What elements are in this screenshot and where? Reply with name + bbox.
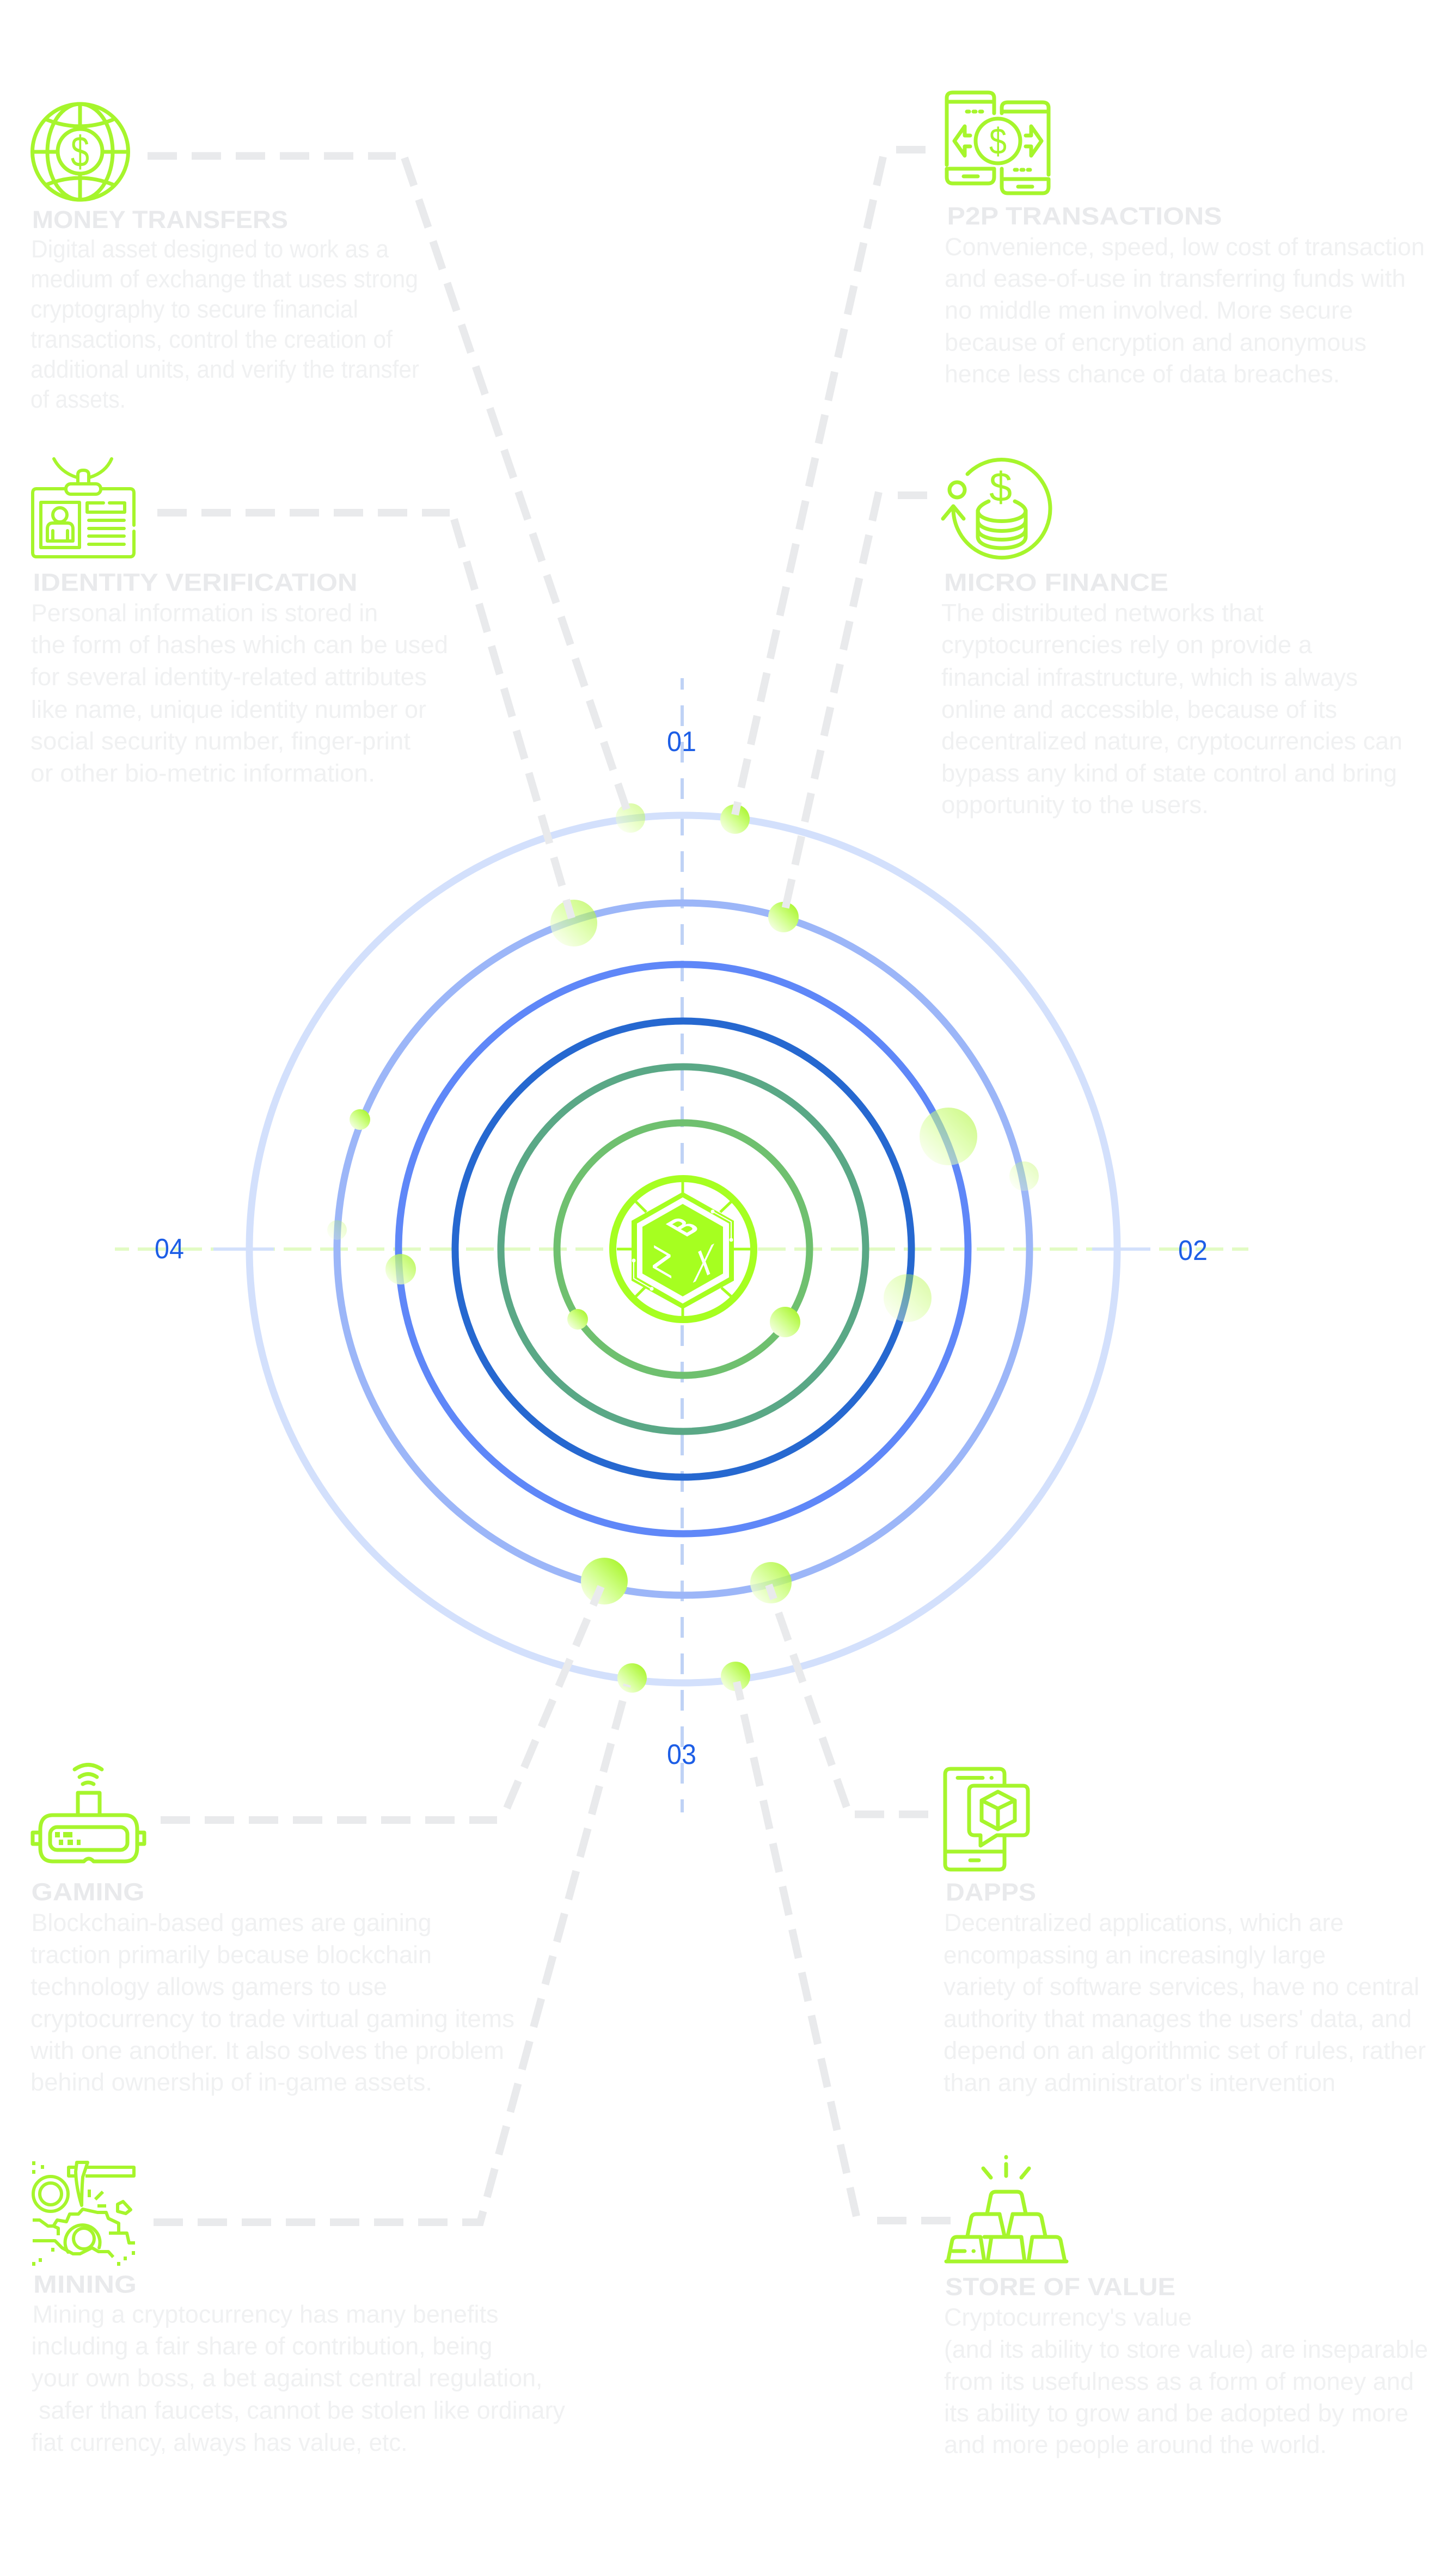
body text: Convenience, speed, low cost of transaction [945,233,1425,261]
body text: (and its ability to store value) are inseparable [944,2335,1428,2363]
body text: cryptography to secure financial [30,295,358,323]
body text: than any administrator's intervention [944,2069,1335,2097]
axis labels: 01 [667,726,696,758]
axis labels [155,726,1208,1770]
body text: Personal information is stored in [31,599,378,627]
body text: Blockchain-based games are gaining [32,1909,431,1936]
body text: technology allows gamers to use [30,1972,387,2001]
panel: store of value [944,2157,1428,2458]
body text: social security number, finger-print [30,727,411,755]
central logo: Z [652,1237,672,1287]
heading: MINING [33,2271,137,2298]
axis labels: 02 [1178,1235,1208,1267]
icon: smartphone with cube bubble [945,1769,1028,1870]
body text [30,235,419,413]
icon: coin stack with cycle arrow [943,460,1050,558]
body text [945,233,1425,388]
body text: because of encryption and anonymous [945,329,1367,356]
heading: STORE OF VALUE [945,2273,1175,2301]
panel: mining [32,2161,565,2456]
body text: online and accessible, because of its [941,696,1337,723]
body text: your own boss, a bet against central regulation, [32,2364,542,2391]
body text: safer than faucets, cannot be stolen like ordinary [39,2396,565,2424]
heading: P2P TRANSACTIONS [947,202,1222,230]
panel: P2P transactions [945,93,1425,388]
body text [944,2303,1428,2458]
panel: micro finance [941,460,1402,819]
body text: the form of hashes which can be used [31,631,448,659]
central logo: X [691,1234,716,1293]
body text: additional units, and verify the transfer [30,355,419,383]
dashed connectors [148,150,951,2222]
body text: Digital asset designed to work as a [31,235,389,263]
icon: pickaxe and coins [32,2161,135,2266]
body text: decentralized nature, cryptocurrencies can [941,727,1402,755]
body text: its ability to grow and be adopted by more [944,2399,1408,2427]
body text: no middle men involved. More secure [945,296,1353,324]
body text: with one another. It also solves the problem [30,2037,504,2064]
central logo: B [658,1213,708,1241]
icon: coin stack with cycle arrow: $ [989,464,1012,511]
heading: MONEY TRANSFERS [32,206,288,233]
axis labels: 04 [155,1233,184,1265]
icon: two phones exchanging money: $ [989,121,1007,162]
body text: encompassing an increasingly large [944,1941,1326,1969]
body text: Mining a cryptocurrency has many benefits [33,2300,499,2328]
heading: MICRO FINANCE [944,568,1168,597]
panel: dapps [944,1769,1426,2097]
icon: VR headset with wifi [33,1765,144,1861]
heading: IDENTITY VERIFICATION [33,568,357,597]
body text: medium of exchange that uses strong [30,265,418,293]
body text: Cryptocurrency's value [944,2303,1192,2331]
orbit dots [327,803,1039,1693]
body text [32,2300,565,2456]
icon: gold bars [946,2157,1067,2261]
icon: globe with dollar [33,104,128,200]
concentric rings [249,815,1117,1683]
panel: gaming [30,1765,514,2096]
body text: and more people around the world. [944,2431,1327,2458]
axes: dashed cross [115,678,1248,1812]
body text: hence less chance of data breaches. [945,360,1340,388]
body text: including a fair share of contribution, being [32,2332,493,2360]
body text: variety of software services, have no central [944,1972,1419,2001]
body text: cryptocurrency to trade virtual gaming items [30,2005,514,2032]
body text: behind ownership of in-game assets. [30,2068,432,2096]
body text: from its usefulness as a form of money and [944,2368,1414,2395]
body text [944,1909,1426,2097]
icon: two phones exchanging money [947,93,1049,193]
panel: identity verification [30,459,448,787]
body text: Decentralized applications, which are [944,1909,1344,1936]
body text: like name, unique identity number or [31,696,426,723]
body text: of assets. [30,385,126,413]
body text: and ease-of-use in transferring funds with [945,265,1406,292]
body text: transactions, control the creation of [30,325,393,353]
body text: authority that manages the users' data, and [944,2005,1412,2032]
icon: ID badge [33,459,134,557]
heading: GAMING [32,1878,145,1906]
body text [30,1909,514,2096]
body text: cryptocurrencies rely on provide a [941,631,1313,659]
heading: DAPPS [946,1878,1036,1906]
body text: The distributed networks that [941,599,1264,627]
body text: for several identity-related attributes [30,663,427,691]
axis labels: 03 [667,1739,696,1770]
body text: opportunity to the users. [941,791,1209,819]
body text: bypass any kind of state control and bring [941,759,1397,787]
body text: depend on an algorithmic set of rules, rather [944,2037,1426,2064]
panel: money transfers [30,104,419,413]
body text [941,599,1402,819]
body text: financial infrastructure, which is always [941,663,1358,691]
body text: or other bio-metric information. [30,759,375,787]
body text [30,599,448,787]
body text: traction primarily because blockchain [30,1941,432,1969]
body text: fiat currency, always has value, etc. [32,2429,407,2456]
icon: globe with dollar: $ [71,127,89,176]
central logo [613,1179,753,1319]
